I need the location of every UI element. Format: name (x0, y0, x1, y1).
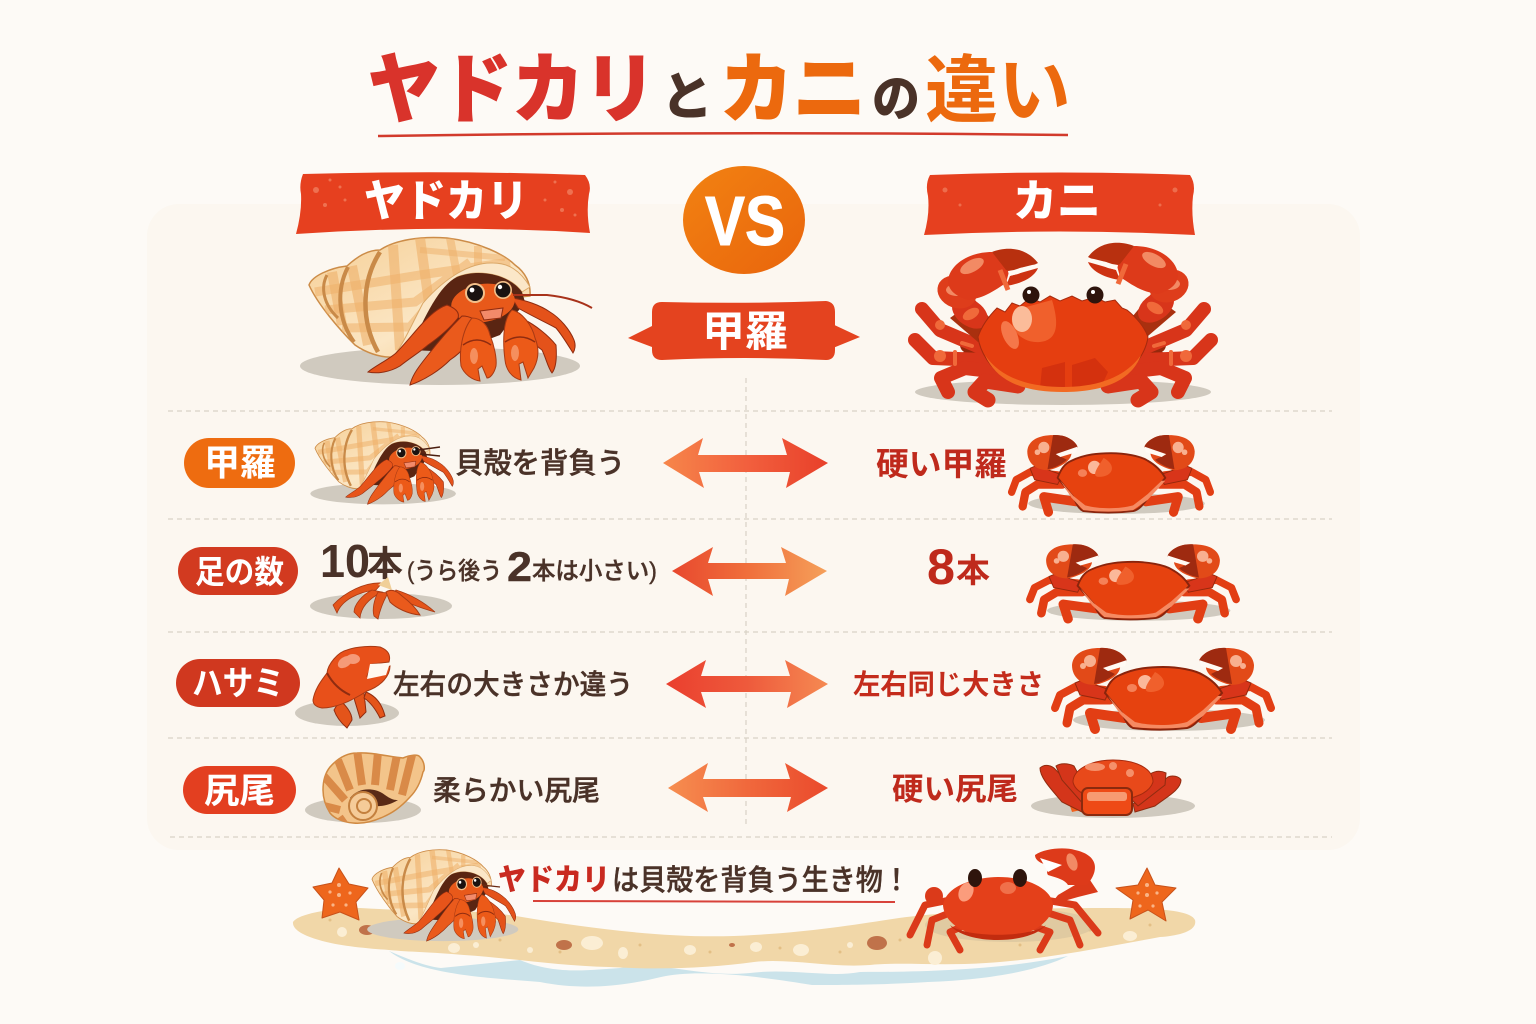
title: ヤドカリ (368, 48, 656, 133)
title underline (378, 133, 1068, 136)
arrow (663, 438, 828, 488)
footer message: ヤドカリ (498, 864, 610, 897)
banner label: 甲羅 (702, 298, 788, 359)
large crab illustration (915, 243, 1211, 405)
banner: ヤドカリ (296, 165, 590, 234)
row dividers (168, 378, 1332, 837)
pill: 甲羅 (184, 434, 295, 488)
row 4: 尻尾 (183, 750, 1195, 825)
title: 違い (925, 49, 1071, 132)
icon: shell (305, 750, 424, 825)
large hermit crab illustration (300, 238, 592, 385)
row 2: 足の数 (178, 535, 1236, 621)
text: note (407, 543, 657, 590)
icon: crab (1030, 544, 1236, 621)
VS text: VS (705, 182, 785, 260)
comparison panel (147, 204, 1360, 850)
footer message (498, 864, 910, 897)
pill: ハサミ: ハサミ (192, 656, 284, 705)
title (368, 48, 1071, 133)
text: note: (うら後う (407, 558, 502, 585)
banner label: ヤドカリ (364, 165, 528, 229)
pill: 足の数: 足の数 (195, 547, 284, 593)
footer message: は貝殻を背負う生き物！ (612, 864, 910, 897)
text: note: 本は小さい) (532, 558, 657, 585)
banner label: カニ (1013, 165, 1101, 229)
text: 硬い甲羅: 硬い甲羅 (876, 439, 1007, 485)
pill: 甲羅: 甲羅 (204, 434, 276, 486)
sand (293, 908, 1195, 968)
icon: crab rear (1031, 760, 1195, 818)
row 3: ハサミ (176, 646, 1271, 731)
icon: claw (295, 646, 399, 728)
text: 10本 (320, 535, 403, 587)
pill: 尻尾: 尻尾 (204, 763, 275, 814)
crab on beach (910, 848, 1098, 950)
footer underline (533, 901, 895, 902)
text: note: 2 (507, 543, 532, 590)
arrow (672, 547, 827, 596)
text: 8本: 8 (927, 539, 955, 595)
title: の (872, 71, 920, 127)
icon: hermit crab (310, 422, 456, 504)
icon: hermit crab legs (310, 577, 452, 619)
banner: 甲羅 (628, 298, 860, 360)
water (389, 951, 1068, 987)
title: カニ (720, 48, 866, 133)
title: と (661, 69, 713, 127)
text: 貝殻を背負う: 貝殻を背負う (455, 440, 625, 482)
row 1: 甲羅 (184, 422, 1210, 514)
footer beach scene (293, 848, 1195, 987)
text: 左右の大きさか違う: 左右の大きさか違う (393, 663, 633, 703)
starfish right (1116, 868, 1176, 921)
text: 10本: 本 (367, 536, 403, 587)
hermit crab on beach (367, 850, 518, 941)
VS badge (683, 166, 805, 274)
icon: crab (1012, 435, 1210, 514)
arrow (668, 763, 828, 812)
text: 柔らかい尻尾: 柔らかい尻尾 (433, 769, 600, 809)
text: 硬い尻尾: 硬い尻尾 (892, 764, 1018, 809)
text: 左右同じ大きさ: 左右同じ大きさ (853, 663, 1044, 703)
text: 10本: 10 (320, 535, 370, 587)
arrow (666, 660, 828, 708)
text: 8本: 本 (956, 544, 990, 592)
starfish left (313, 868, 368, 920)
banner: カニ (924, 165, 1195, 235)
icon: crab (1055, 648, 1271, 731)
pill: 尻尾 (183, 763, 296, 814)
text: 8本 (927, 539, 990, 595)
